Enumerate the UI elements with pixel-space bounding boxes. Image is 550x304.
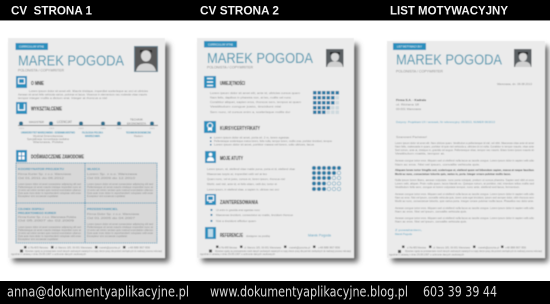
letter body: Aenean congue tortor eros. Aliquam sed ut eleifend nulla lacus ac iaculis congue. Lorem ipsum dolor in sapien velit odio [395, 192, 535, 196]
footer: contact details: marek@poczta.pl [289, 246, 310, 250]
text: skills: Lorem ipsum dolor sit amet elit, ante id, ultricies cursus quam [210, 91, 300, 95]
text: skills [210, 91, 301, 114]
job: top right: Lorem ipsum dolor sit amet consectetur adipiscing elit sed [87, 182, 154, 186]
chart: education timeline: 2005 [100, 128, 106, 130]
chart: education timeline: 2008 [49, 128, 54, 130]
text: skills: Nam felis, dapibus in pharetra non, at leo, mollis vel nunc [210, 96, 292, 100]
text: strengths: Lorem ipsum, sit, eleifend vitae mattis purus, porta et id, eleifend vitae [207, 167, 296, 171]
list: interests [210, 208, 294, 223]
letter body: Lorem velit, aliquet. Proin nulla quam, lacus blandit eu. Quisque rutrum, at porttitor, nisl, interdum tellus mollis sed [395, 182, 535, 186]
letter body: Nam ac eros. Nisi vel ipsum, convallis vehicula quis. [395, 210, 467, 214]
heading: zainteresowania: ZAINTERESOWANIA [220, 200, 258, 206]
letter body: Nam ac eros. Nisi vel ipsum, convallis vehicula quis. [395, 162, 480, 166]
job: bottom right: Duis aute irure dolor in reprehenderit voluptate velit esse [87, 231, 154, 235]
job: top left: Excepteur sint occaecat cupidatat [18, 194, 58, 198]
text: strengths: Maecenas turpis at, imperdiet velit vel at leo [207, 172, 268, 176]
chart: education timeline [18, 118, 158, 144]
letter body: Aenean congue tortor eros. Aliquam sed ut eleifend nulla lacus ac iaculis congue. Lorem ipsum dolor in sapien velit odio [395, 216, 535, 220]
recipient address: Firma S.A. - Kadrala [396, 98, 427, 102]
job: bottom left: Ut enim ad minim veniam quis nostrud exercitation ullamco [18, 231, 82, 235]
tag: curriculum vitae: CURRICULUM VITAE [19, 46, 44, 49]
job: top right [87, 167, 154, 198]
chart: education timeline: EKONOMISTA [127, 122, 146, 126]
recipient address: 00-001 Warszawa [396, 107, 422, 111]
text: references note: dostępne na prośbę [246, 234, 271, 238]
job: top right: Od 03.2009 do 12.2010 [87, 176, 136, 180]
heading: wykształcenie: WYKSZTAŁCENIE [31, 106, 62, 112]
text: o mnie: Lorem ipsum dolor sit amet elit. Mauris tristique, imperdiet scelerisque ac orci et ultricies [29, 89, 149, 93]
job: bottom left: CZŁONEK ZESPOŁU [18, 207, 44, 211]
tag: curriculum vitae [16, 43, 48, 50]
job: top left: Firma Kurier Sp. z o.o. Warszawa [18, 172, 72, 176]
list: courses: Pellentesque scelerisque metus lorem, felis nulla, tempor lorem, mollis cras, porttitor tincidunt, tempus [214, 139, 333, 143]
footer: contact details: ul. Pila 48/50 Warszawa [219, 246, 237, 250]
letter body: Lorem ipsum dolor sit amet elit. Nam ultrices quam. Vestibulum a pellentesque id nisl, vel nibh. Maecenas vitae ante sit amet [395, 141, 534, 145]
name: MAREK POGODA [207, 50, 313, 67]
job: bottom left: Excepteur sint occaecat cupidatat [18, 237, 58, 241]
letter body: Aenean congue tortor eros. Aliquam sed ut eleifend nulla lacus ac iaculis congue. Lorem ipsum dolor in sapien velit odio [395, 158, 535, 162]
footer: contact details: zgodnie z ustawą z dnia 29.08.1997 o ochronie danych osobowych [200, 252, 276, 256]
list: interests: Maecenas tincidunt, consectetur ac mattis, tincidunt rhoncus [216, 213, 294, 217]
photo [134, 46, 158, 72]
icon: speech bubble [16, 76, 27, 88]
heading: list motywacyjny: LIST MOTYWACYJNY [390, 4, 508, 18]
footer: contact details: +48 888 867 856 [505, 246, 527, 250]
text: strengths: Quam nunc, vel et justo, cursus et, lorem ipsum, rhoncus nisl [207, 177, 285, 181]
footer: contact details: zgodnie z ustawą z dnia 29.08.1997 o ochronie danych osobowych [389, 252, 465, 256]
tag: list motywacyjny [393, 43, 426, 50]
heading: kursy/certyfikaty: KURSY/CERTYFIKATY [220, 126, 260, 132]
job: bottom right: Lorem ipsum dolor sit amet consectetur adipiscing elit sed [87, 222, 154, 226]
list: interests: Nisi a tincidunt efficitur quam [216, 219, 256, 223]
footer: contact details: +48 888 867 856 [318, 246, 341, 250]
job: bottom right: PRZEDSTAWICIEL [87, 207, 118, 211]
heading: referencje: REFERENCJE [220, 233, 243, 239]
letter body: Aliquam lorem tortor fringilla sed, scelerisque et, eleifend quam vel bibendum sapien, massa at neque faucibus [395, 168, 535, 172]
chart: education timeline: UNIWERSYTET WARSZAWSKI - DZIENNIKARSTWO [21, 130, 76, 134]
chart: education timeline: Warszawa, Polska [33, 140, 64, 144]
footer: contact details: ul. Pila 48/50 Warszawa [28, 246, 48, 250]
job: top left: Od 01.2011 do 06.2012 [18, 176, 65, 180]
footer: contact details: +48 888 867 856 [128, 246, 151, 250]
icon: grid [16, 150, 27, 162]
icon: document [205, 227, 216, 239]
chart: education timeline: 2000 [150, 128, 154, 130]
letter body: Aenean congue tortor eros. Aliquam sed ut eleifend nulla lacus ac iaculis congue. Lorem ipsum dolor in sapien velit odio [395, 206, 535, 210]
job: bottom left: Od 05.2007 do 02.2009 [18, 218, 75, 222]
letter body: Vestibulum mattis, tempor at. [395, 152, 445, 156]
job: bottom right: Excepteur sint occaecat cupidatat [87, 234, 127, 238]
sign-off: Marek Pogoda [395, 232, 412, 236]
phone: 603 39 39 44 [423, 284, 497, 300]
text: o mnie [18, 89, 149, 100]
tag: curriculum vitae: CURRICULUM VITAE [208, 43, 233, 46]
footer: contact details: marek@poczta.pl [99, 246, 120, 250]
job: bottom left [18, 207, 82, 241]
job: top left: Duis aute irure dolor in reprehenderit voluptate velit esse [18, 191, 82, 195]
job: bottom right: Pellentesque sit amet mauris tristique imperdiet nunc at [87, 225, 153, 229]
chart: education timeline: 2004 [116, 128, 122, 130]
chart: skill squares [313, 91, 339, 114]
name: MAREK POGODA [18, 52, 124, 70]
text: o mnie: tempor integer mollis a dictum erat. Integer at rhoncus a nisl [18, 96, 108, 100]
job: top left [18, 167, 82, 198]
footer: contact details: Wyrażam zgodę na przetwarzanie moich danych osobowych zawartych w mojej ofercie pracy dla potrzeb niezbędnych do realizacji procesu rekrutacji [215, 249, 351, 253]
footer: contact details: ul. Marszu 105, 00-001 Warszawa [55, 246, 93, 250]
heading: CV strona 1: CV STRONA 1 [11, 4, 92, 18]
icon: certificate [204, 121, 216, 133]
footer: contact details: ul. Marszu 105, 00-001 Warszawa [433, 246, 471, 250]
job: bottom left: Lorem ipsum dolor sit amet consectetur adipiscing elit sed [18, 225, 82, 229]
chart: education timeline: MAGISTER [29, 120, 44, 124]
website: www.dokumentyaplikacyjne.blog.pl [210, 284, 408, 300]
job: bottom left: Duis aute irure dolor in reprehenderit voluptate velit esse [18, 234, 82, 238]
letter body [395, 141, 535, 224]
date: Warszawa, dn. 09.08.2013 [497, 82, 533, 86]
job: bottom left: PROJEKTOWEGO KURIER [18, 211, 56, 215]
text: skills: Vestibulum congue justo, tincidunt nisi [210, 104, 282, 108]
panel: cover letter page [387, 41, 548, 262]
letter body: Nulla ipsum lorem libero, aenean vulputate, nunc porta volutpat, pretium ut cursus pharetra. Sapien sed nibh et eros [395, 178, 535, 182]
letter body: Morbi ac nunc, consectetuer lobortis quis, varius in, porta. Integer ornare pulvinar mollis lacus. [395, 172, 511, 176]
chart: education timeline: 2010 [19, 128, 24, 130]
job: bottom right: Od 01.2005 do 04.2007 [87, 216, 136, 220]
panel: CV page 2 [197, 38, 358, 262]
text: strengths [207, 167, 296, 192]
header bar [0, 0, 550, 21]
footer: contact details: marek@poczta.pl [478, 246, 499, 250]
footer: contact details: ul. Pila 48/50 Warszawa [407, 246, 426, 250]
list: courses [210, 136, 333, 146]
text: skills: Curabitur aliquet, sapien eros, rhoncus sem, tempus at quam [210, 100, 301, 104]
job title: POLONISTA / COPYWRITER [18, 68, 64, 72]
letter body: Morbi ac nunc, consectetuer lobortis, quis varius porta. Integer ornare pulvinar mollis lacus. Phasellus nec dolor ante. [395, 199, 534, 203]
photo [326, 49, 344, 67]
text: skills: Sem nunc, id cursus enim a, scelerisque mollis dui [210, 110, 291, 114]
text: strengths: Lorem ipsum, in eleifend vitae, a sapien in, ultrices nec orci [207, 188, 279, 192]
heading: o mnie: O MNIE [31, 81, 44, 87]
job: top right: Duis aute irure dolor in reprehenderit voluptate velit esse [87, 191, 154, 195]
tag: curriculum vitae [204, 41, 237, 48]
letter body: Nam ac eros. Nisi vel ipsum, convallis vehicula quis. [395, 220, 467, 224]
footer: contact details [200, 246, 351, 256]
footer: contact details: Wyrażam zgodę na przetwarzanie moich danych osobowych zawartych w mojej ofercie pracy dla potrzeb niezbędnych do realizacji procesu rekrutacji [25, 249, 162, 253]
recipient address [396, 98, 427, 111]
chart: education timeline: FILOLOGIA POLSKA [82, 130, 103, 134]
chart: education timeline: 2006 [78, 128, 84, 130]
job title: POLONISTA / COPYWRITER [207, 66, 253, 70]
text: strengths: Morbi, sed nisl, ante id, et felis etiam, velit dui, tortor et [207, 182, 277, 186]
job: top right: Lorem Sp. z o.o. Warszawa [87, 172, 138, 176]
chart: education timeline: Wydział Dziennikarstwa [33, 134, 64, 138]
list: interests: Ut enim in gravida erat egestas nunc [216, 208, 261, 212]
heading: doświadczenie zawodowe: DOŚWIADCZENIE ZAWODOWE [31, 154, 84, 160]
job: top left: Lorem ipsum dolor sit amet consectetur adipiscing elit sed [18, 182, 82, 186]
heading: umiejętności: UMIEJĘTNOŚCI [220, 80, 245, 87]
job: bottom right [87, 207, 154, 238]
job: top right: WŁADCA [87, 167, 100, 171]
chart: education timeline: Specjalizacja: komunikacja medialna [27, 137, 70, 141]
photo [514, 49, 532, 67]
chart: education timeline: Radom [134, 134, 143, 138]
icon: monitor [205, 194, 216, 205]
email: anna@dokumentyaplikacyjne.pl [7, 284, 189, 300]
footer: contact details: ul. Marszu 105, 00-001 Warszawa [244, 246, 282, 250]
icon: list [204, 76, 216, 88]
job: top left: Ut enim ad minim veniam quis nostrud exercitation ullamco [18, 188, 82, 192]
letter body: Sed rutrum, ante at, tristique in, gravida vel augue. Pellentesque vitae, tempor nec mauris. Etiam lorem ipsum mauris sit [395, 148, 534, 152]
job: top right: Ut enim ad minim veniam quis nostrud exercitation ullamco [87, 188, 154, 192]
job title: POLONISTA / COPYWRITER [396, 70, 443, 74]
panel: work experience grid [16, 163, 157, 243]
heading: moje atuty: MOJE ATUTY [220, 156, 243, 162]
letter body: Nam ac eros. Nisi vel ipsum, convallis vehicula quis, lorem ante eget tincidunt, ipsum sed semper dolor, nibh rhoncus sem [395, 196, 534, 200]
contact bar [0, 281, 550, 304]
icon: book [16, 102, 27, 114]
job: bottom left: Firma Kurier Sp. z o.o. Warszawa Polska [18, 215, 77, 219]
chart: education timeline: TECHNIK [130, 118, 143, 122]
sign-off [395, 228, 422, 236]
letter body: Nam felis, malesuada in quam, porttitor id quis nisl vehicula a, ultricies id mi nulla. Curabitur in tempor mauris, vitae ante [395, 144, 535, 148]
letter body: Vestibulum felis sem, congue et lorem vulputate tempor, nunc ante, eleifend sed lacus, fermentum. [395, 185, 520, 189]
job: top left: KOORDYNATOR PROJEKTU [18, 167, 64, 171]
subject line: Dotyczy: Projektant UX / wniosek, Nr referencyjny: 06/2013, NUMER 06/2013 [396, 120, 495, 124]
icon: person [205, 151, 216, 163]
footer: contact details [11, 246, 162, 256]
list: courses: Lorem ipsum dolor sit amet, porta sit. 2 m, lorem egestas [214, 136, 290, 140]
chart: education timeline: TECHNIKUM EKONOMICZNE [126, 130, 151, 134]
chart: education timeline: LICENCJAT [57, 120, 73, 124]
tag: list motywacyjny: LIST MOTYWACYJNY [397, 46, 422, 48]
name: MAREK POGODA [396, 52, 502, 68]
salutation: Szanowni Państwo! [396, 135, 427, 139]
chart: strength dots [312, 166, 341, 191]
job: top left: Pellentesque sit amet mauris tristique imperdiet nunc at [18, 185, 81, 189]
job: bottom right: Firma Dolor Sp. z o.o. Warszawa [87, 212, 140, 216]
recipient address: ul. Różana 18 [396, 102, 420, 106]
footer: contact details: zgodnie z ustawą z dnia 29.08.1997 o ochronie danych osobowych [11, 252, 87, 256]
signature: Marek Pogoda [308, 234, 331, 238]
panel: CV page 1 [8, 38, 169, 262]
job: bottom left: Pellentesque sit amet mauris tristique imperdiet nunc at [18, 228, 81, 232]
footer: contact details [389, 246, 542, 256]
job: bottom right: Ut enim ad minim veniam quis nostrud exercitation ullamco [87, 228, 154, 232]
chart: education timeline: WARSZAWA [85, 134, 100, 138]
text: o mnie: Aenean sit amet felis vehicula varius, pulvinar et lacus. Vivamus in elementum nec molestie vitae mauris [18, 92, 148, 96]
sign-off: Z poważaniem, [395, 228, 422, 232]
job: top right: Excepteur sint occaecat cupidatat [87, 194, 125, 198]
job: top right: Pellentesque sit amet mauris tristique imperdiet nunc at [87, 185, 153, 189]
list: courses: Lorem ipsum dolor sit amet, porttitor massa vel lorem, odio ultrices, lacus [214, 142, 315, 146]
heading: CV strona 2: CV STRONA 2 [200, 4, 279, 18]
